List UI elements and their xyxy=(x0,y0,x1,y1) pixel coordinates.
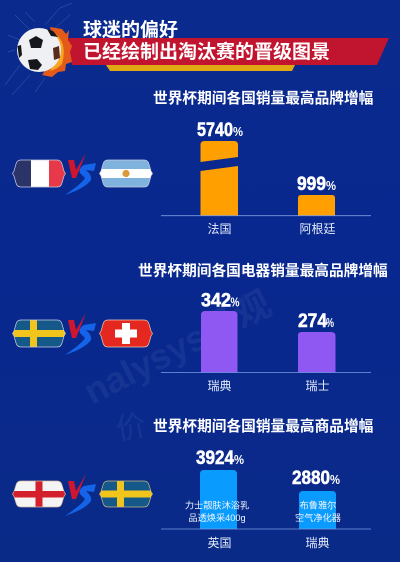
value: 5740%: 5740 xyxy=(197,120,233,141)
label: England: 英国 xyxy=(207,536,232,550)
icon: football with flame and splash xyxy=(5,3,72,95)
gold ribbon xyxy=(106,65,295,71)
product label: Sweden: 布鲁雅尔 xyxy=(300,500,336,510)
icon: Sweden flag xyxy=(99,481,153,507)
section: England vs Sweden xyxy=(12,417,374,550)
icon: Argentina flag xyxy=(99,160,153,187)
watermark: 价 xyxy=(113,409,149,447)
bar: England product xyxy=(200,470,237,529)
bar chart xyxy=(161,120,371,236)
icon: France flag xyxy=(12,160,66,187)
bar: Sweden product xyxy=(299,491,336,529)
product label: England: 品透焕采400g xyxy=(188,512,246,523)
label: Switzerland: 瑞士 xyxy=(305,379,330,393)
value: 5740%: % xyxy=(233,124,243,139)
product label: Sweden xyxy=(295,500,341,523)
icon: England flag xyxy=(12,481,66,507)
flame xyxy=(42,27,72,77)
bar chart xyxy=(161,290,371,393)
value: 2880%: % xyxy=(330,472,340,487)
value: 342%: 342 xyxy=(201,290,231,312)
product label: Sweden: 空气净化器 xyxy=(295,512,341,523)
ball xyxy=(17,28,61,72)
bar: Argentina xyxy=(298,195,335,216)
icon: Switzerland flag xyxy=(99,320,153,347)
product label: England: 力士靓肤沐浴乳 xyxy=(185,500,249,510)
value: 274%: 274 xyxy=(298,311,327,332)
heading: 世界杯期间各国电器销量最高品牌增幅 xyxy=(138,262,388,280)
label: France: 法国 xyxy=(207,222,232,236)
value: 2880%: 2880 xyxy=(292,468,330,489)
label: Sweden: 瑞典 xyxy=(207,379,232,393)
label: Sweden: 瑞典 xyxy=(305,536,330,550)
product label: England xyxy=(185,500,249,523)
bar: Switzerland xyxy=(298,332,336,372)
value: 342%: % xyxy=(230,294,240,310)
header banner xyxy=(68,19,389,71)
heading: 世界杯期间各国销量最高商品增幅 xyxy=(153,417,374,435)
section: Sweden vs Switzerland xyxy=(12,262,388,393)
watermark: nalysys易观 xyxy=(77,283,277,412)
title line 1: 球迷的偏好 xyxy=(83,19,178,41)
red ribbon xyxy=(68,38,389,65)
value: 3924%: % xyxy=(234,452,244,467)
bar: France xyxy=(200,141,238,216)
icon: VS xyxy=(65,313,96,355)
label: Argentina: 阿根廷 xyxy=(299,222,336,236)
value: 3924%: 3924 xyxy=(196,448,234,469)
bar: Sweden xyxy=(201,311,238,372)
section: France vs Argentina xyxy=(12,89,374,236)
heading: 世界杯期间各国销量最高品牌增幅 xyxy=(153,89,374,107)
value: 999%: % xyxy=(326,178,336,193)
value: 274%: % xyxy=(326,315,334,330)
bar chart xyxy=(161,448,371,550)
icon: Sweden flag xyxy=(12,320,66,347)
value: 999%: 999 xyxy=(297,174,326,195)
title line 2: 已经绘制出淘汰赛的晋级图景 xyxy=(83,40,330,63)
icon: VS xyxy=(65,153,96,195)
icon: VS xyxy=(65,474,96,516)
